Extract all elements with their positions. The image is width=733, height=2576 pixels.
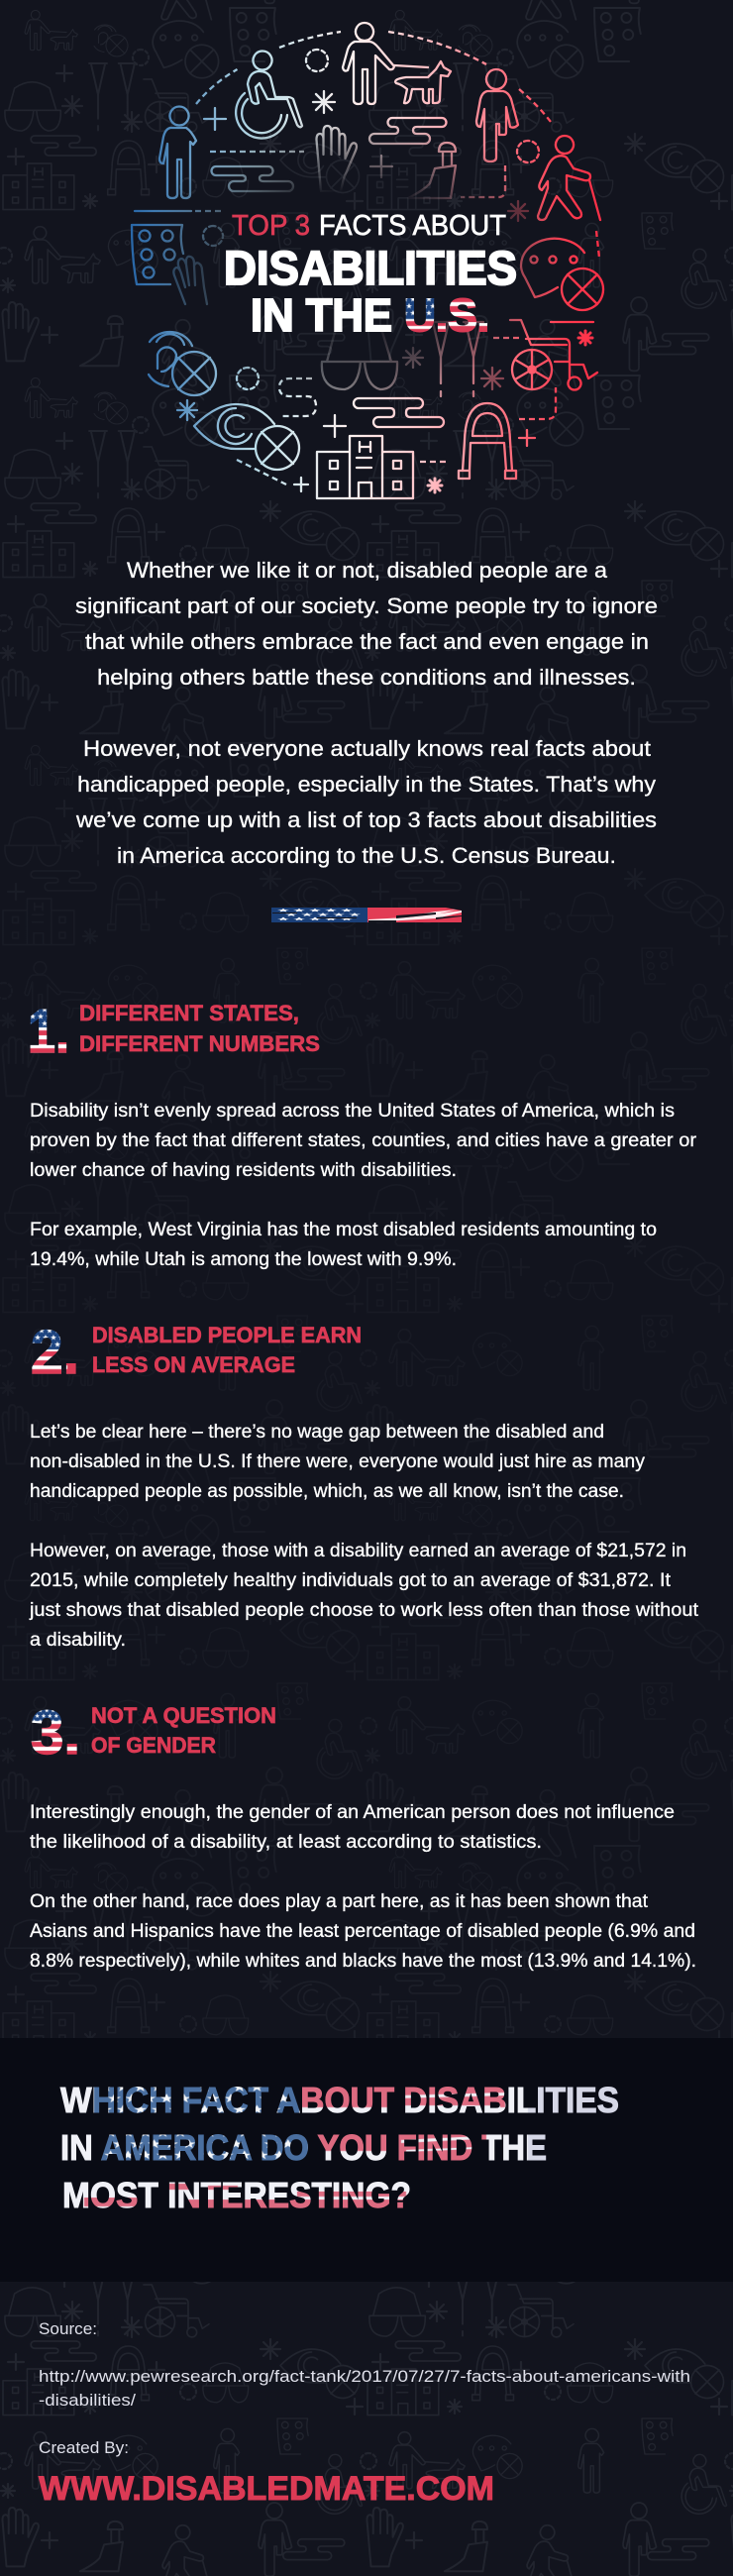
credit block bbox=[39, 2438, 494, 2508]
icon: prosthetic foot bbox=[408, 143, 456, 198]
icon: crutches bbox=[431, 322, 483, 396]
title line: top 3 facts about bbox=[232, 210, 506, 242]
call to action band bbox=[0, 2038, 733, 2282]
section 2: disabled people earn less bbox=[29, 1319, 699, 1651]
section 2 body: non-disabled in the U.S. If there were, everyone would just hire as many bbox=[30, 1451, 646, 1472]
section 1 heading: DIFFERENT NUMBERS bbox=[79, 1031, 320, 1056]
call to action question bbox=[60, 2080, 619, 2215]
section 2 body: handicapped people as possible, which, as we all know, isn’t the case. bbox=[30, 1481, 624, 1502]
section 3 body: 8.8% respectively), while whites and blacks have the most (13.9% and 14.1%). bbox=[30, 1951, 696, 1972]
title line: U.S. flag text: U.S. bbox=[404, 289, 489, 341]
section 1 heading: DIFFERENT STATES, bbox=[79, 1001, 299, 1025]
flag divider bbox=[271, 908, 462, 922]
intro text: Whether we like it or not, disabled people are a bbox=[127, 558, 608, 583]
bold asterisks bbox=[428, 331, 592, 492]
icon: cloud line bottom bbox=[354, 398, 444, 427]
section 3 body: On the other hand, race does play a part here, as it has been shown that bbox=[30, 1891, 649, 1912]
section 1 body: For example, West Virginia has the most disabled residents amounting to bbox=[30, 1220, 657, 1240]
hero icon circle bbox=[132, 23, 603, 498]
solid connector lines bbox=[135, 211, 593, 322]
section 1: different states bbox=[28, 998, 697, 1270]
section 3 body bbox=[30, 1802, 696, 1972]
intro text: we’ve come up with a list of top 3 facts about disabilities bbox=[75, 807, 657, 832]
section 2 body: just shows that disabled people choose to work less often than those without bbox=[29, 1600, 699, 1621]
section 2 heading: DISABLED PEOPLE EARN bbox=[92, 1323, 362, 1347]
icon: ear crossed bbox=[149, 332, 216, 395]
number 3: 3. bbox=[31, 1699, 80, 1768]
section 1 body: 19.4%, while Utah is among the lowest with 9.9%. bbox=[30, 1249, 457, 1270]
section 3 body: Asians and Hispanics have the least percentage of disabled people (6.9% and bbox=[30, 1921, 695, 1942]
icon: walking frame bbox=[459, 403, 516, 479]
icon: wheelchair user bbox=[236, 52, 302, 139]
icon: person with guide dog bbox=[343, 23, 451, 104]
section 2 body bbox=[29, 1422, 699, 1651]
asterisks bbox=[177, 91, 335, 420]
section 1 body bbox=[30, 1101, 697, 1270]
section 3 heading: NOT A QUESTION bbox=[91, 1703, 276, 1728]
section 1 body: Disability isn’t evenly spread across the United States of America, which is bbox=[30, 1101, 675, 1122]
icon: raised hand bbox=[317, 126, 357, 191]
number 2: 2. bbox=[31, 1319, 79, 1387]
section 1 body: proven by the fact that different states, counties, and cities have a greater or bbox=[30, 1130, 697, 1151]
dim asterisks bbox=[403, 201, 528, 389]
section 3 heading: OF GENDER bbox=[91, 1733, 216, 1758]
section 2 body: 2015, while completely healthy individuals got to an average of $31,872. It bbox=[30, 1570, 672, 1591]
section 3 body: Interestingly enough, the gender of an American person does not influence bbox=[30, 1802, 675, 1823]
dashed circles bbox=[203, 50, 539, 389]
icon: speech bubble crossed bbox=[521, 239, 603, 310]
icon: eye crossed bbox=[194, 404, 299, 470]
call to action question: WHICH FACT ABOUT DISABILITIES bbox=[60, 2080, 619, 2120]
section 3: not a question of gender bbox=[30, 1699, 696, 1972]
created by label: Created By: bbox=[39, 2438, 129, 2457]
section 3 heading bbox=[91, 1703, 276, 1758]
section 3 body: the likelihood of a disability, at least according to statistics. bbox=[30, 1832, 542, 1853]
section 2 heading: LESS ON AVERAGE bbox=[92, 1352, 295, 1377]
icon: wheelchair bbox=[510, 320, 597, 390]
icon: person with prosthetic leg bbox=[476, 69, 518, 161]
icon: cloud line left bbox=[212, 166, 293, 191]
source block bbox=[39, 2319, 690, 2410]
source block: http://www.pewresearch.org/fact-tank/2017/07/27/7-facts-about-americans-with bbox=[39, 2367, 690, 2386]
title line: disabilities: DISABILITIES bbox=[224, 243, 517, 295]
icon: standing person bbox=[159, 107, 196, 198]
title line: top 3 facts about: TOP 3 bbox=[232, 210, 310, 242]
icon: small hand reading braille bbox=[173, 257, 207, 304]
section 1 body: lower chance of having residents with disabilities. bbox=[30, 1160, 457, 1181]
intro text: significant part of our society. Some people try to ignore bbox=[75, 593, 658, 618]
intro text: handicapped people, especially in the States. That’s why bbox=[77, 772, 656, 797]
intro text: that while others embrace the fact and even engage in bbox=[85, 629, 649, 654]
section 2 body: Let’s be clear here – there’s no wage gap between the disabled and bbox=[30, 1422, 604, 1443]
call to action question: IN AMERICA DO YOU FIND THE bbox=[60, 2127, 547, 2168]
website: WWW.DISABLEDMATE.COM bbox=[39, 2470, 494, 2508]
icon: cloud line right bbox=[369, 118, 446, 144]
number 1: 1. bbox=[28, 998, 69, 1066]
title line: in the: IN THE bbox=[251, 289, 392, 341]
icon: person walking with cane bbox=[538, 136, 600, 220]
title bbox=[224, 210, 517, 341]
call to action question: MOST INTERESTING? bbox=[62, 2175, 411, 2215]
intro text: However, not everyone actually knows real facts about bbox=[83, 736, 651, 761]
dashed connector lines bbox=[195, 32, 599, 484]
plus signs bbox=[204, 108, 535, 491]
section 2 body: However, on average, those with a disability earned an average of $21,572 in bbox=[30, 1541, 686, 1561]
icon: hospital bbox=[317, 436, 413, 498]
section 1 heading bbox=[79, 1001, 320, 1056]
intro text: in America according to the U.S. Census Bureau. bbox=[117, 843, 616, 868]
source block: -disabilities/ bbox=[39, 2391, 136, 2410]
icon: glasses bbox=[322, 323, 397, 389]
section 2 body: a disability. bbox=[30, 1630, 126, 1651]
section 2 heading bbox=[92, 1323, 362, 1377]
intro text: helping others battle these conditions and illnesses. bbox=[97, 665, 636, 690]
icon: braille card bbox=[132, 225, 183, 284]
source block: Source: bbox=[39, 2319, 97, 2338]
title line: top 3 facts about: FACTS ABOUT bbox=[319, 210, 506, 242]
intro text bbox=[75, 558, 658, 868]
